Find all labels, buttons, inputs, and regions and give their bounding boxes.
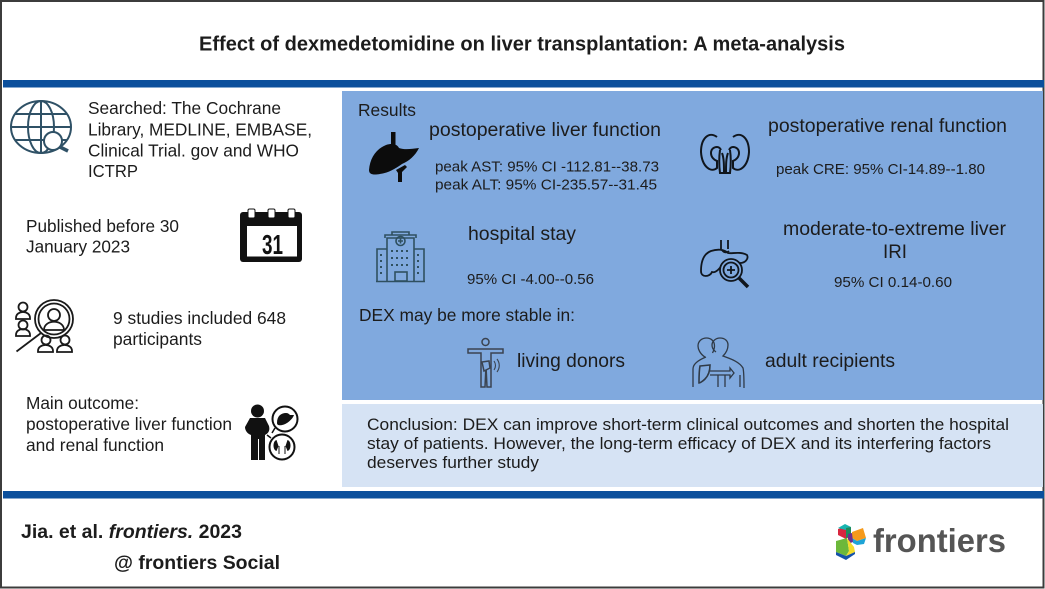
text: liver IRI: moderate-to-extreme liver [783,218,1006,240]
panel: results [342,91,1043,400]
icon: coloured cubes [836,524,866,560]
results background [342,91,1043,400]
logo wordmark: frontiers [873,522,1006,559]
text: search sources: ICTRP [88,161,138,181]
text: liver IRI: 95% CI 0.14-0.60 [834,275,952,291]
text: liver IRI [783,218,1006,291]
logo: frontiers [836,522,1006,560]
icon: people under magnifier [16,300,73,352]
text: DEX stable subgroup heading: DEX may be more stable in: [359,305,575,325]
text: publication date: Published before 30 [26,216,179,236]
text: liver IRI: IRI [883,241,907,263]
bottom blue bar [3,491,1044,498]
icon: patient with liver and kidney bubbles [245,404,298,460]
text: hospital stay [467,223,594,288]
icon: globe search [11,101,71,153]
icon: adult recipients with liver transfer [693,338,744,388]
heading: results: Results [358,100,416,120]
text: renal function [768,115,1007,178]
text: conclusion: deserves further study [367,453,539,472]
text: renal function: peak CRE: 95% CI-14.89--1.80 [776,162,985,178]
text: renal function: postoperative renal function [768,115,1007,137]
text: main outcome: postoperative liver function [26,414,232,434]
text: hospital stay: hospital stay [468,223,576,245]
text: liver function: peak ALT: 95% CI-235.57--31.45 [435,178,657,194]
icon: calendar: 31 [262,229,283,260]
text: main outcome: and renal function [26,435,164,455]
conclusion background [342,404,1043,487]
text: studies: participants [113,329,202,349]
icon: hospital [376,232,425,282]
text: adult recipients: adult recipients [765,350,895,372]
text: conclusion: Conclusion: DEX can improve short-term clinical outcomes and shorten the hospital [367,415,1009,434]
text: liver function [429,119,661,194]
text: hospital stay: 95% CI -4.00--0.56 [467,272,594,288]
text: search sources: Library, MEDLINE, EMBASE, [88,120,312,140]
handle: @ frontiers Social [114,552,280,574]
text: studies: 9 studies included 648 [113,308,286,328]
text: main outcome: Main outcome: [26,393,139,413]
citation: Jia. et al. frontiers. 2023 [21,521,242,543]
top blue bar [3,80,1044,88]
icon: kidneys [701,135,749,173]
icon: liver under magnifier [701,240,748,287]
title: Effect of dexmedetomidine on liver transplantation: A meta-analysis [199,34,845,56]
text: publication date: January 2023 [26,236,130,256]
text: living donors: living donors [517,350,625,372]
text: conclusion: stay of patients. However, the long-term efficacy of DEX and its interfering factors [367,434,991,453]
text: search sources: Clinical Trial. gov and WHO [88,140,299,160]
panel: methods [11,98,317,460]
text: liver function: postoperative liver function [429,119,661,141]
icon: liver [369,132,419,182]
text: liver function: peak AST: 95% CI -112.81--38.73 [435,160,659,176]
icon: living donor figure [468,338,503,387]
icon: calendar [240,209,302,262]
text: search sources: Searched: The Cochrane [88,98,281,118]
panel: conclusion [342,404,1043,487]
